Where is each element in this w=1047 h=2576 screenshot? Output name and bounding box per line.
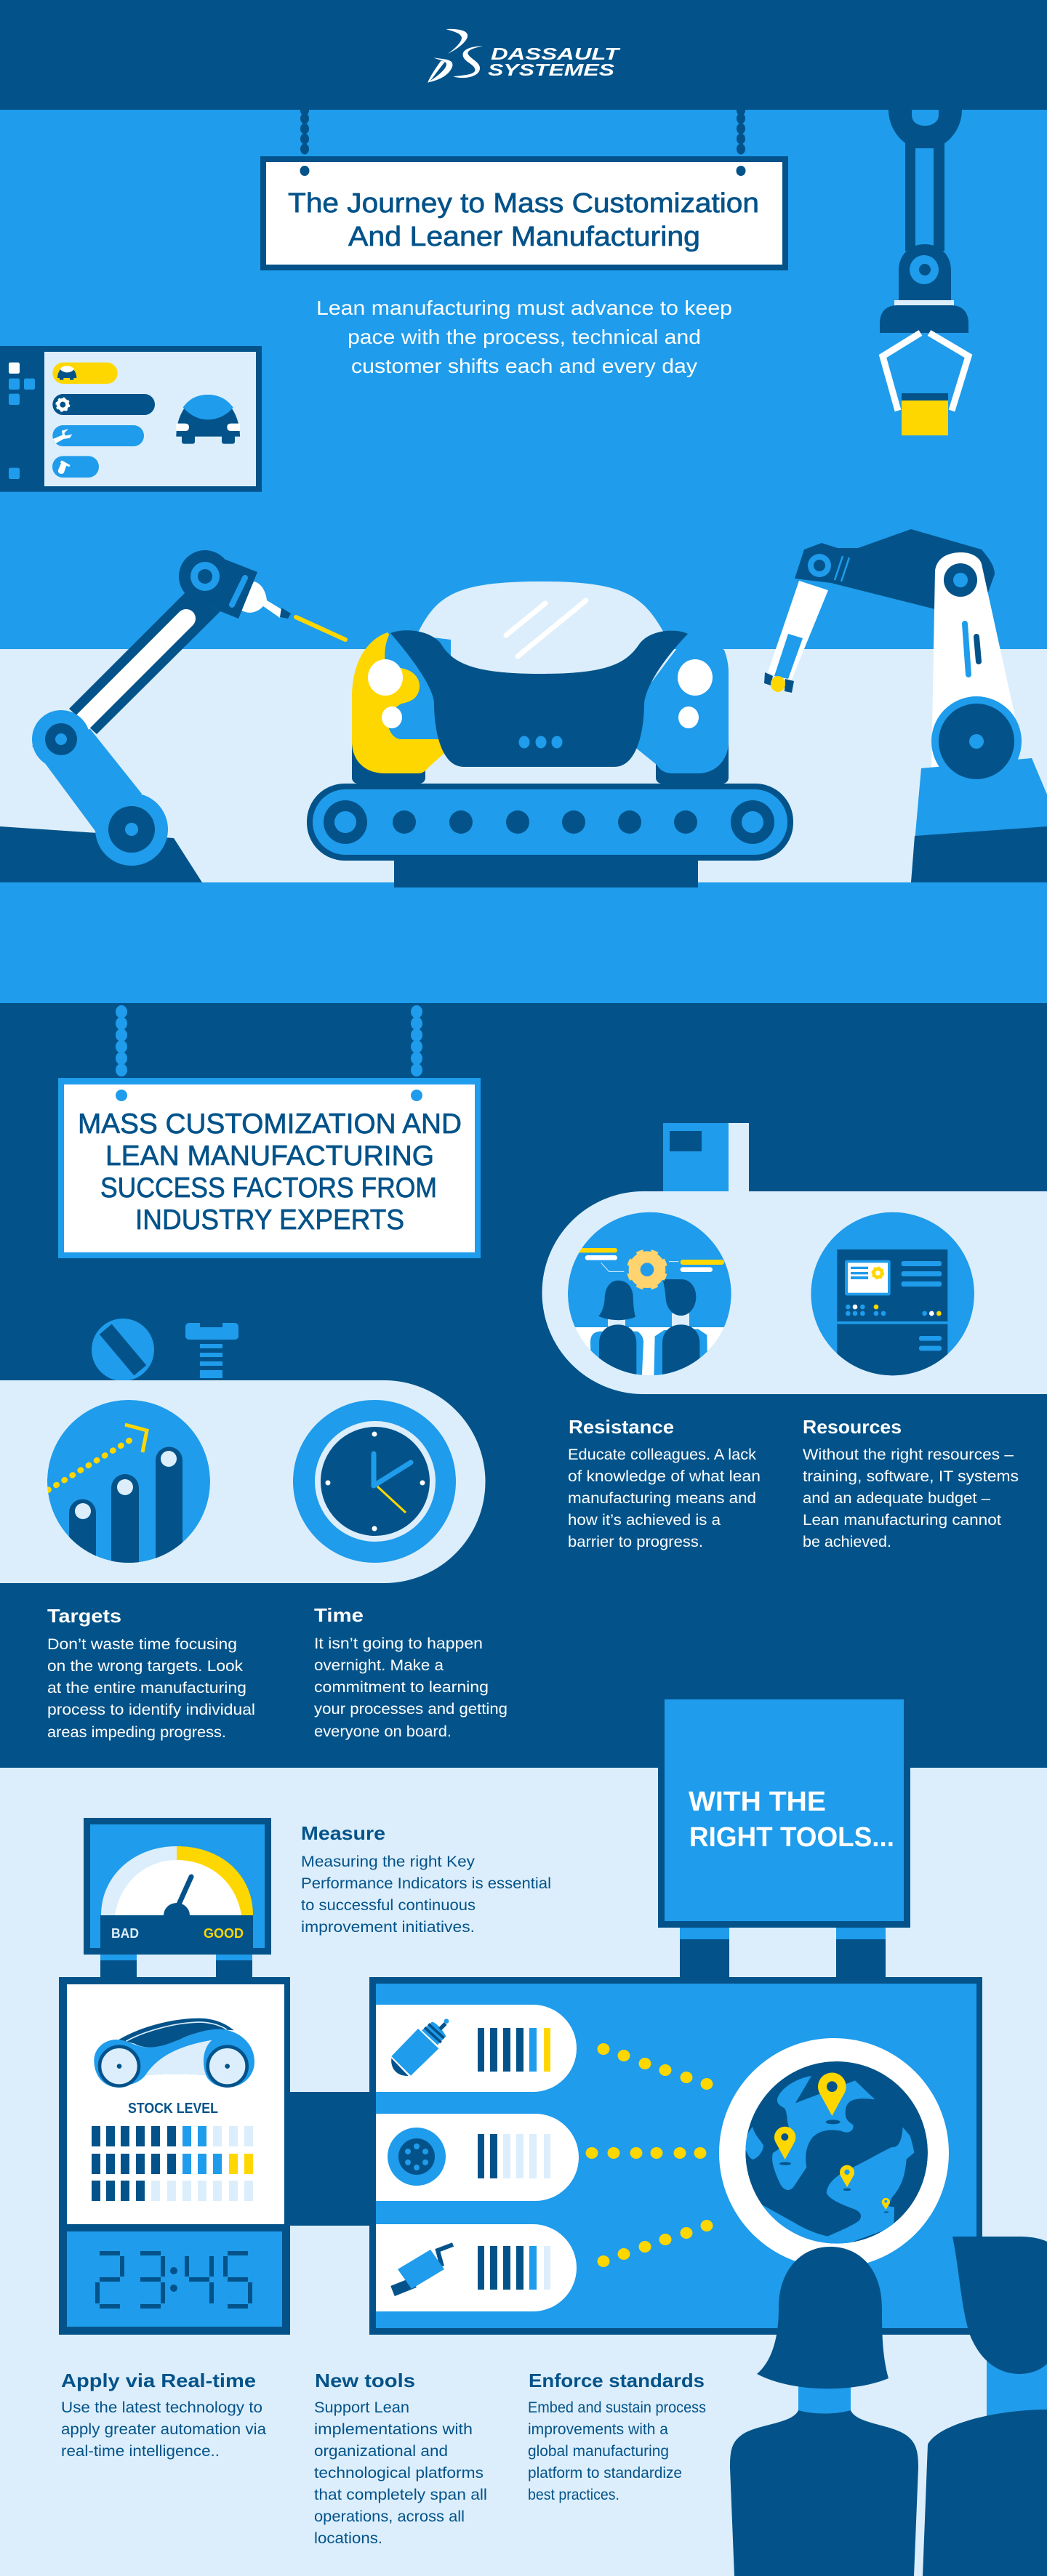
digital clock 23:45 (97, 2253, 250, 2306)
text: resources: be achieved. (803, 1534, 891, 1550)
text: resources: Lean manufacturing cannot (803, 1512, 1001, 1529)
text: targets: process to identify individual (47, 1702, 255, 1718)
gauge labels (111, 1926, 244, 1941)
text: new tools: New tools (315, 2370, 415, 2391)
right robot arm (764, 529, 1047, 882)
icon: spark plug (391, 2018, 449, 2076)
text: measure: Performance Indicators is essential (301, 1875, 551, 1892)
text: resistance: manufacturing means and (568, 1490, 756, 1507)
text: new tools: implementations with (314, 2421, 473, 2438)
welding tool (240, 581, 345, 640)
text: time: Time (314, 1604, 364, 1626)
logo: Dassault Systemes: SYSTEMES (488, 60, 615, 79)
level bars (478, 2134, 550, 2178)
row: wheel hub (376, 2114, 579, 2201)
background: hero section (0, 0, 1047, 1003)
text: time: everyone on board. (314, 1723, 452, 1740)
text: enforce standards: Embed and sustain process (528, 2399, 706, 2416)
row: muffler (376, 2224, 577, 2311)
icon: bolt (185, 1323, 238, 1378)
car front icon (176, 395, 240, 444)
yellow connection dots (586, 2043, 713, 2267)
pill: gear (52, 394, 155, 415)
text: new tools (314, 2370, 487, 2547)
text: enforce standards: platform to standardize (528, 2465, 682, 2482)
text: resources: training, software, IT systems (803, 1468, 1019, 1485)
subtitle: customer shifts each and every day (351, 355, 697, 377)
with the right tools sign (658, 1694, 910, 1977)
heading: MASS CUSTOMIZATION AND (78, 1108, 462, 1140)
heading: LEAN MANUFACTURING (105, 1140, 434, 1172)
text: resistance: how it’s achieved is a (568, 1512, 721, 1529)
title sign (260, 156, 788, 270)
left robot arm (0, 550, 345, 882)
title: The Journey to Mass Customization (288, 188, 759, 219)
pill: car (52, 363, 118, 384)
text: targets: areas impeding progress. (47, 1724, 226, 1741)
text: new tools: that completely span all (314, 2487, 487, 2503)
label: stock level: STOCK LEVEL (128, 2101, 218, 2117)
title (288, 188, 759, 252)
text: apply via real-time: Apply via Real-time (61, 2370, 256, 2391)
pill: wrench (52, 425, 144, 446)
robotic gripper (880, 110, 968, 435)
text: resources: Without the right resources – (803, 1446, 1014, 1463)
text: measure: Measure (301, 1822, 385, 1844)
icon: globe with pins (745, 2061, 928, 2246)
icon: wheel hub (388, 2128, 446, 2186)
text: time (314, 1604, 508, 1740)
text: new tools: technological platforms (314, 2465, 484, 2482)
text: time: It isn’t going to happen (314, 1635, 483, 1652)
gauge labels: BAD (111, 1926, 139, 1941)
icon: muffler (393, 2245, 453, 2291)
text: resources: and an adequate budget – (803, 1490, 990, 1507)
main tools screen (369, 1977, 982, 2335)
chains: success factors sign (116, 1005, 422, 1076)
text: measure: to successful continuous (301, 1897, 476, 1914)
text: targets: on the wrong targets. Look (47, 1658, 244, 1675)
heading: INDUSTRY EXPERTS (135, 1204, 404, 1236)
sign text: RIGHT TOOLS... (689, 1822, 894, 1853)
sign text: WITH THE (689, 1787, 826, 1817)
success factors sign (58, 1078, 481, 1258)
text: enforce standards: best practices. (528, 2487, 619, 2503)
text: targets: Don’t waste time focusing (47, 1636, 237, 1653)
background: factory floor (0, 649, 1047, 882)
logo: Dassault Systemes (428, 29, 621, 83)
text: enforce standards (528, 2370, 706, 2503)
subtitle: pace with the process, technical and (348, 326, 701, 348)
logo: Dassault Systemes: DASSAULT (491, 44, 621, 63)
sign text (689, 1787, 894, 1853)
text: time: commitment to learning (314, 1679, 489, 1696)
icon: clock (293, 1400, 456, 1563)
text: resistance: Resistance (569, 1416, 674, 1438)
text: targets: Targets (47, 1605, 121, 1627)
right band: resistance and resources (542, 1123, 1047, 1394)
text: resistance: Educate colleagues. A lack (568, 1446, 757, 1463)
text: time: overnight. Make a (314, 1657, 444, 1674)
car on conveyor (352, 581, 729, 784)
text: apply via real-time: real-time intelligence.. (61, 2443, 220, 2460)
text: time: your processes and getting (314, 1701, 508, 1718)
text: apply via real-time: Use the latest technology to (61, 2399, 262, 2416)
text: resistance (568, 1416, 761, 1550)
text: measure: Measuring the right Key (301, 1853, 476, 1870)
left band: targets and time (0, 1380, 486, 1583)
header band with logo (0, 0, 1047, 110)
person: woman (730, 2247, 918, 2576)
background: tools section (0, 1768, 1047, 2576)
icon: targets chart (47, 1400, 210, 1570)
text: enforce standards: Enforce standards (529, 2370, 705, 2391)
text: resources: Resources (803, 1416, 902, 1438)
stock level panel (59, 1977, 290, 2335)
subtitle (316, 297, 732, 377)
title: And Leaner Manufacturing (348, 222, 700, 252)
text: resources (803, 1416, 1019, 1550)
text: enforce standards: global manufacturing (528, 2443, 669, 2460)
gauge (84, 1818, 271, 1977)
control screen (0, 346, 262, 492)
heading (78, 1108, 462, 1236)
text: measure: improvement initiatives. (301, 1919, 475, 1936)
text: new tools: operations, across all (314, 2508, 465, 2525)
background: success factors section (0, 1003, 1047, 1768)
icon: slotted screw head (92, 1319, 154, 1381)
icon: resources control panel (811, 1212, 974, 1380)
heading: SUCCESS FACTORS FROM (100, 1172, 437, 1204)
text: resistance: barrier to progress. (568, 1534, 703, 1550)
text: apply via real-time: apply greater automation via (61, 2421, 266, 2438)
icon: concept car (94, 2018, 254, 2088)
person: man (923, 2237, 1047, 2576)
text: measure (301, 1822, 551, 1936)
text: targets (47, 1605, 255, 1741)
level bars (478, 2028, 550, 2072)
chains: title sign (300, 105, 745, 154)
row: spark plug (376, 2005, 577, 2092)
connector between screens (290, 2092, 370, 2226)
icon: resistance team and gear (560, 1212, 734, 1380)
text: new tools: locations. (314, 2530, 382, 2547)
subtitle: Lean manufacturing must advance to keep (316, 297, 732, 319)
stock level bars (92, 2126, 253, 2201)
text: resistance: of knowledge of what lean (568, 1468, 761, 1485)
text: apply via real-time (61, 2370, 266, 2460)
text: new tools: organizational and (314, 2443, 448, 2460)
conveyor belt (307, 784, 793, 887)
text: new tools: Support Lean (314, 2399, 409, 2416)
level bars (478, 2246, 550, 2290)
text: targets: at the entire manufacturing (47, 1680, 246, 1696)
text: enforce standards: improvements with a (528, 2421, 668, 2438)
pill: spark plug (52, 456, 99, 478)
gauge labels: GOOD (204, 1926, 244, 1941)
